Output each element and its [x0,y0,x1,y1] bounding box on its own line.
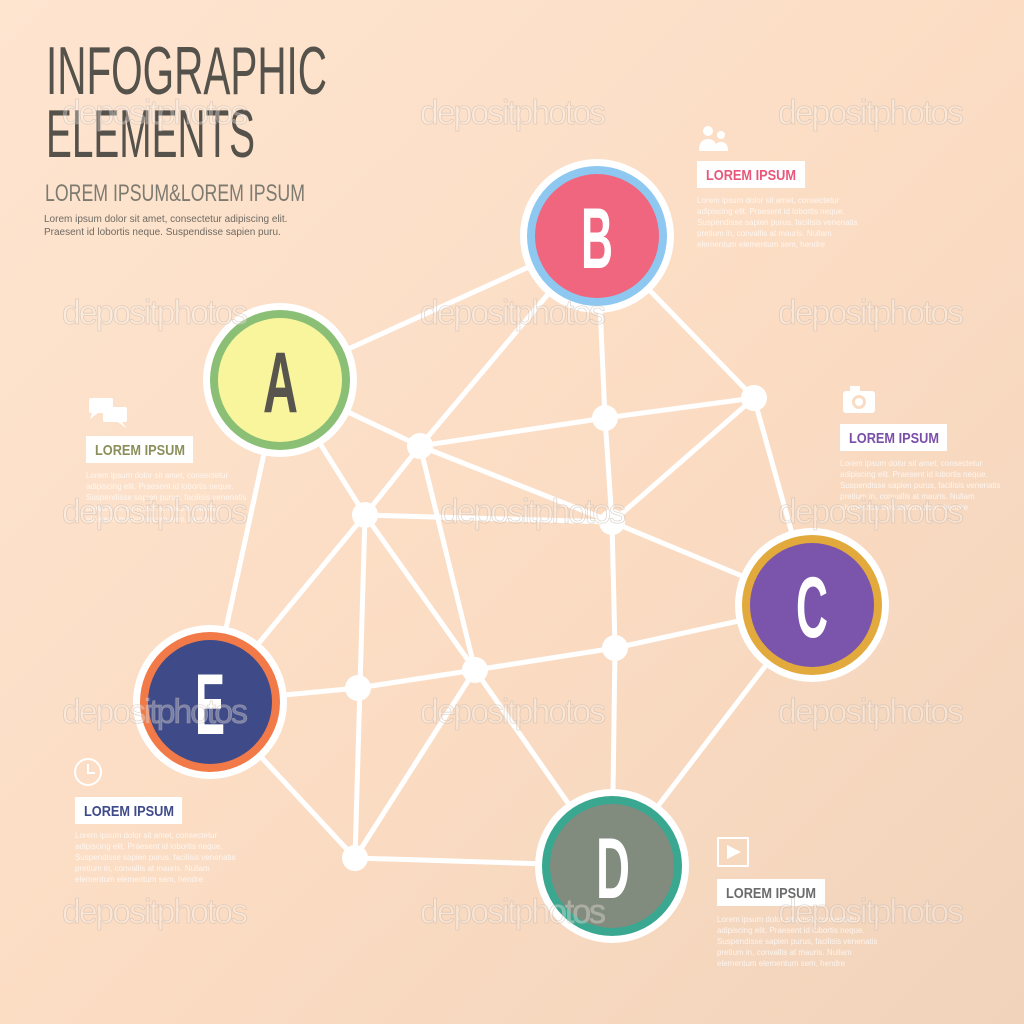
circle C [735,528,889,682]
watermarks: depositphotos [420,893,605,931]
panel E: pretium in, convallis at mauris. Nullam [75,864,210,873]
panel A: LOREM IPSUM [95,442,185,459]
panel C: Suspendisse sapien purus, facilisis venenatis [840,481,1001,490]
icon: people [699,126,728,151]
watermarks: depositphotos [778,94,963,132]
panel E: LOREM IPSUM [84,803,174,820]
icon: clock [75,759,101,785]
watermarks: depositphotos [420,294,605,332]
watermarks: depositphotos [62,294,247,332]
panel B [697,126,858,249]
panel C: elementum elementum sem, hendre [840,503,969,512]
network lines [210,236,812,866]
panel B: Suspendisse sapien purus, facilisis venenatis [697,218,858,227]
panel A: Lorem ipsum dolor sit amet, consectetur [86,471,229,480]
subtitle: LOREM IPSUM&LOREM IPSUM [45,180,305,207]
panel A: pretium in, convallis at mauris. Nullam [86,504,221,513]
watermarks: depositphotos [62,893,247,931]
panel B: pretium in, convallis at mauris. Nullam [697,229,832,238]
icon: camera [843,386,875,413]
panel A: Suspendisse sapien purus, facilisis venenatis [86,493,247,502]
watermarks: depositphotos [62,493,247,531]
watermarks: depositphotos [420,94,605,132]
panel A: elementum elementum sem, hendre [86,515,215,524]
title: INFOGRAPHIC [46,33,327,109]
intro text: Lorem ipsum dolor sit amet, consectetur adipiscing elit. [44,214,287,225]
panel E [75,759,236,884]
title [46,33,327,172]
watermarks: depositphotos [778,294,963,332]
circle D [535,789,689,943]
panel B: elementum elementum sem, hendre [697,240,826,249]
watermarks: depositphotos [440,493,625,531]
panel D: Suspendisse sapien purus, facilisis venenatis [717,937,878,946]
watermarks: depositphotos [62,94,247,132]
watermarks: depositphotos [420,693,605,731]
panel D: LOREM IPSUM [726,885,816,902]
panel D: pretium in, convallis at mauris. Nullam [717,948,852,957]
watermarks [62,94,963,931]
panel B: adipiscing elit. Praesent id lobortis neque. [697,207,845,216]
circle C: C [796,560,828,656]
panel A: adipiscing elit. Praesent id lobortis neque. [86,482,234,491]
panel C: pretium in, convallis at mauris. Nullam [840,492,975,501]
panel D: elementum elementum sem, hendre [717,959,846,968]
circle B [520,159,674,313]
panel E: Lorem ipsum dolor sit amet, consectetur [75,831,218,840]
circle A [203,303,357,457]
panel B: LOREM IPSUM [706,167,796,184]
watermarks: depositphotos [778,893,963,931]
watermarks: depositphotos [778,493,963,531]
title: ELEMENTS [46,96,255,172]
panel B: Lorem ipsum dolor sit amet, consectetur [697,196,840,205]
panel D: Lorem ipsum dolor sit amet, consectetur [717,915,860,924]
panel E: elementum elementum sem, hendre [75,875,204,884]
panel C [840,386,1001,512]
watermarks: depositphotos [778,693,963,731]
panel E: adipiscing elit. Praesent id lobortis neque. [75,842,223,851]
circle E: E [195,657,225,753]
icon: chat bubbles [89,398,127,428]
panel D [717,838,878,968]
intro text [44,214,287,238]
circle B: B [581,191,613,287]
watermarks: depositphotos [62,693,247,731]
icon: play [718,838,748,866]
panel D: adipiscing elit. Praesent id lobortis neque. [717,926,865,935]
intro text: Praesent id lobortis neque. Suspendisse sapien puru. [44,227,281,238]
panel A [86,398,247,524]
panel C: Lorem ipsum dolor sit amet, consectetur [840,459,983,468]
network nodes [342,385,767,871]
circle A: A [263,335,298,431]
circle D: D [596,821,630,917]
circle E [133,625,287,779]
panel E: Suspendisse sapien purus, facilisis venenatis [75,853,236,862]
panel C: adipiscing elit. Praesent id lobortis neque. [840,470,988,479]
panel C: LOREM IPSUM [849,430,939,447]
